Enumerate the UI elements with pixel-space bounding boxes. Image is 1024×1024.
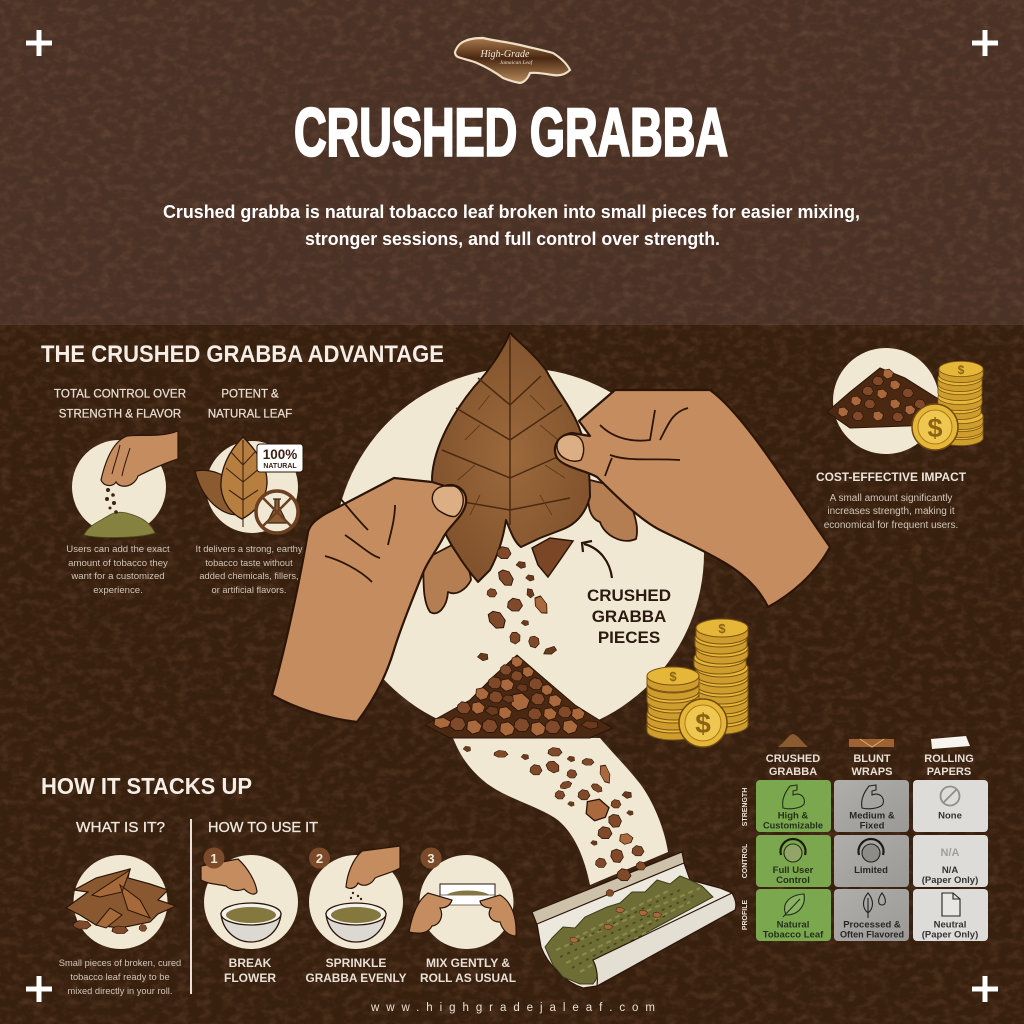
badge: 100% natural: NATURAL — [263, 463, 297, 470]
heading: potent: NATURAL LEAF — [208, 408, 292, 420]
icon: pile and coins: $ — [958, 363, 965, 377]
subtitle: Crushed grabba is natural tobacco leaf broken into small pieces for easier mixing, — [163, 202, 860, 222]
cell: blunt control: Limited — [854, 865, 888, 876]
icon: pile and coins — [827, 348, 983, 454]
left hand — [272, 478, 466, 722]
cell: papers profile — [913, 889, 988, 941]
panel: total control — [54, 388, 186, 596]
comparison table — [742, 734, 988, 941]
heading: the crushed grabba advantage: THE CRUSHED GRABBA ADVANTAGE — [41, 341, 444, 368]
body text: potent: added chemicals, fillers, — [199, 571, 299, 581]
cell: blunt profile — [834, 889, 909, 941]
tobacco leaf — [432, 333, 590, 582]
body text: what is it: tobacco leaf ready to be — [70, 972, 170, 982]
icon: coin stacks: $ — [669, 669, 677, 684]
cell: papers control: N/A — [941, 847, 960, 859]
central illustration: hands tearing leaf — [272, 333, 830, 722]
heading: potent: POTENT & — [221, 388, 279, 400]
cell: blunt control — [834, 835, 909, 887]
step 1: FLOWER — [224, 971, 276, 985]
panel: potent and natural leaf — [195, 388, 303, 595]
falling crushed pieces — [478, 538, 573, 661]
body text: what is it: Small pieces of broken, cured — [59, 958, 181, 968]
cell: blunt strength — [834, 780, 909, 832]
cell: papers strength — [913, 780, 988, 832]
cell: blunt strength: Medium & — [849, 810, 895, 822]
step 3: ROLL AS USUAL — [420, 971, 516, 985]
divider — [190, 819, 192, 994]
panel: what is it — [59, 820, 181, 996]
body text: cost-effective: increases strength, making it — [827, 506, 955, 517]
cell: papers profile: Neutral — [934, 920, 966, 930]
logo: Jamaica leaf badge: Jamaican Leaf — [500, 59, 534, 66]
step 2 — [306, 846, 406, 985]
callout text: GRABBA — [592, 607, 666, 626]
logo: Jamaica leaf badge — [455, 38, 570, 83]
icon: coin stacks: $ — [718, 621, 726, 636]
body text: total control: want for a customized — [70, 571, 165, 582]
heading: how it stacks up: HOW IT STACKS UP — [41, 773, 252, 799]
central illustration: cream circle — [334, 368, 704, 738]
step 3: MIX GENTLY & — [426, 956, 510, 970]
cell: crushed control: Full User — [773, 865, 814, 876]
right hand fingers — [588, 480, 637, 541]
cell: papers strength: None — [938, 810, 962, 822]
callout: crushed grabba pieces — [582, 541, 671, 647]
step 2: 2 — [316, 851, 323, 866]
rolling paper with tobacco — [532, 852, 736, 988]
panel: how to use it — [201, 820, 516, 985]
subtitle: stronger sessions, and full control over strength. — [305, 229, 720, 249]
cell: blunt profile: Often Flavored — [840, 930, 904, 940]
heading: total control: TOTAL CONTROL OVER — [54, 388, 186, 400]
cell: papers control: (Paper Only) — [922, 875, 978, 886]
badge: 100% natural — [257, 444, 303, 472]
row label: control: CONTROL — [742, 843, 749, 878]
step 3 — [409, 848, 516, 985]
cell: crushed profile — [756, 889, 831, 941]
row label: strength: STRENGTH — [742, 788, 749, 826]
body text: cost-effective: A small amount significantly — [830, 493, 952, 504]
step 2: GRABBA EVENLY — [306, 971, 406, 985]
cell: crushed profile: Natural — [777, 920, 809, 930]
column header: crushed grabba — [766, 734, 820, 778]
column header: blunt wraps: WRAPS — [852, 766, 892, 778]
body text: potent: or artificial flavors. — [212, 585, 286, 595]
step 2: SPRINKLE — [326, 956, 386, 970]
cell: crushed strength — [756, 780, 831, 832]
row label: profile: PROFILE — [742, 900, 749, 930]
body text: total control: experience. — [93, 585, 143, 596]
cell: crushed strength: Customizable — [763, 820, 823, 832]
arrow — [582, 541, 612, 578]
heading: total control: STRENGTH & FLAVOR — [59, 408, 181, 420]
column header: crushed grabba: GRABBA — [769, 766, 817, 778]
column header: rolling papers — [924, 736, 974, 778]
body text: cost-effective: economical for frequent users. — [824, 520, 958, 531]
body text: total control: Users can add the exact — [66, 544, 170, 555]
cell: crushed strength: High & — [778, 810, 808, 822]
step 1: BREAK — [229, 956, 272, 970]
central illustration: falling stream to roll — [453, 738, 668, 885]
icon: pile and coins: $ — [927, 413, 943, 443]
icon: coin stacks — [647, 619, 748, 747]
column header: blunt wraps: BLUNT — [853, 753, 891, 765]
title: CRUSHED GRABBA — [294, 94, 728, 170]
stream pieces — [463, 746, 644, 867]
panel: cost-effective impact — [816, 348, 983, 531]
cell: papers control — [913, 835, 988, 887]
column header: blunt wraps — [849, 739, 894, 778]
icon: no chemicals — [256, 491, 298, 533]
body text: potent: tobacco taste without — [205, 558, 293, 568]
website footer: www.highgradejaleaf.com — [370, 1002, 655, 1014]
cell: papers control: N/A — [942, 865, 958, 876]
step 1 — [201, 848, 298, 985]
cell: crushed control: Control — [776, 875, 810, 886]
left hand fingers — [423, 545, 471, 613]
column header: rolling papers: PAPERS — [927, 766, 971, 778]
step 3: 3 — [427, 851, 435, 866]
right hand — [555, 390, 830, 607]
column header: rolling papers: ROLLING — [924, 753, 974, 765]
cell: blunt strength: Fixed — [860, 820, 885, 832]
cell: papers profile: (Paper Only) — [922, 930, 978, 940]
heading: what is it: WHAT IS IT? — [76, 820, 165, 836]
callout text: PIECES — [598, 628, 660, 647]
subtitle — [163, 202, 860, 249]
callout text: CRUSHED — [587, 586, 671, 605]
background: upper header band — [0, 0, 1024, 325]
icon: circle with pinching hand over pile — [72, 431, 178, 537]
cell: crushed control — [756, 835, 831, 887]
body text: potent: It delivers a strong, earthy — [196, 544, 303, 554]
crushed pile — [425, 655, 612, 738]
cell: blunt profile: Processed & — [843, 920, 901, 930]
logo: Jamaica leaf badge: High-Grade — [480, 49, 530, 60]
badge: 100% natural: 100% — [263, 447, 297, 462]
icon: broken leaf pieces — [66, 855, 176, 949]
heading: cost-effective: COST-EFFECTIVE IMPACT — [816, 472, 966, 484]
cell: crushed profile: Tobacco Leaf — [763, 930, 824, 940]
column header: crushed grabba: CRUSHED — [766, 753, 820, 765]
icon: coin stacks: $ — [695, 708, 711, 739]
body text: what is it: mixed directly in your roll. — [68, 986, 172, 996]
body text: total control: amount of tobacco they — [68, 558, 168, 569]
step 1: 1 — [210, 851, 218, 866]
icon: natural leaf — [195, 437, 298, 533]
heading: how to use it: HOW TO USE IT — [208, 820, 318, 836]
